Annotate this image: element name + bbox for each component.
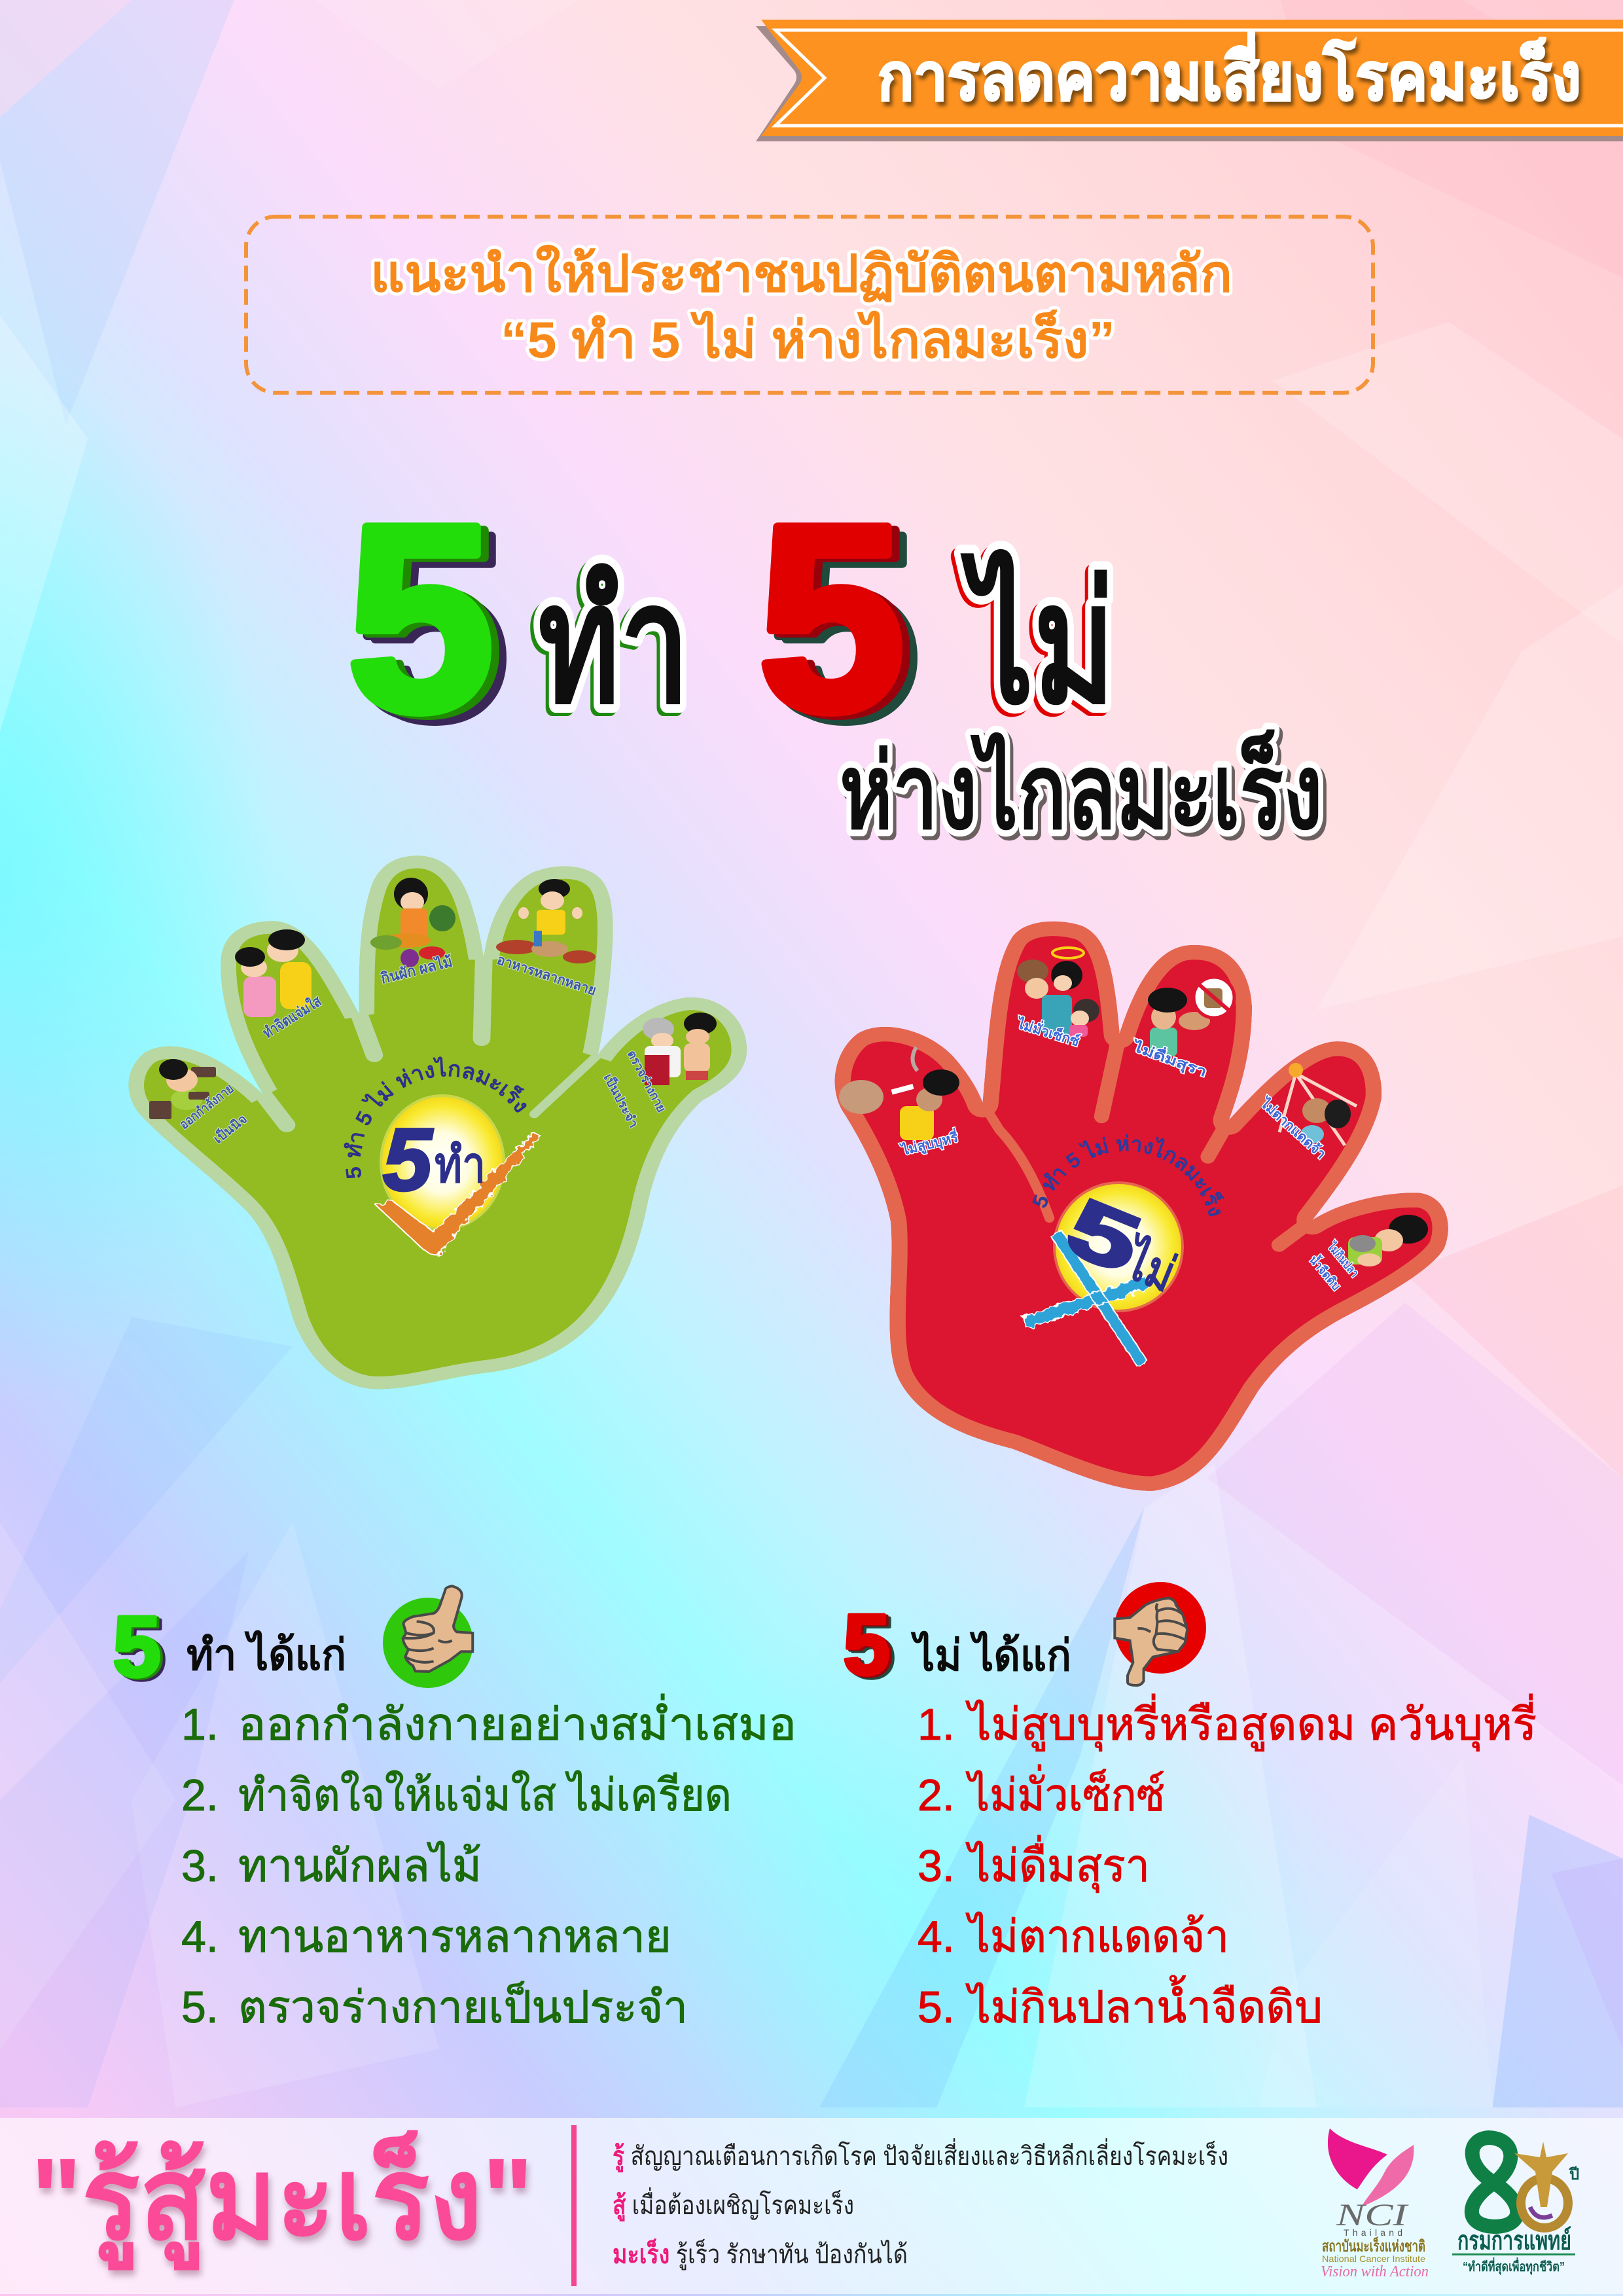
badge word tham: ทำ — [435, 1138, 486, 1193]
item 3: 3. — [918, 1841, 955, 1891]
badge: yellow circle — [1054, 1183, 1183, 1311]
hand shape — [835, 922, 1448, 1491]
finger: smoking — [839, 1047, 959, 1140]
label: happy mind: ทำจิตแจ่มใส — [259, 992, 325, 1041]
item 1: 1. — [181, 1700, 219, 1749]
finger: no unsafe sex — [1017, 948, 1099, 1037]
ribbon shadow — [756, 26, 1623, 141]
footer translucent background — [0, 2118, 1623, 2294]
blue cross mark — [1022, 1230, 1149, 1367]
logo department name: กรมการแพทย์ — [1457, 2226, 1571, 2255]
label: exercise: ออกกำลังกาย — [177, 1081, 236, 1132]
red hand: 5 don't — [835, 922, 1448, 1491]
badge 5 tham — [383, 1110, 486, 1209]
item 1 text: ออกกำลังกายอย่างสม่ำเสมอ — [238, 1694, 796, 1749]
label: regularly: เป็นนิจ — [210, 1111, 250, 1147]
logo: Department of Medical Services 80 years — [1452, 2138, 1579, 2275]
callout line 1: แนะนำให้ประชาชนปฏิบัติตนตามหลัก — [370, 244, 1232, 302]
badge word mai: ไม่ — [1115, 1230, 1184, 1303]
panel: 5 do list — [113, 1586, 796, 2032]
logo butterfly — [1328, 2128, 1387, 2189]
item 5: 5. — [918, 1982, 955, 2032]
badge 5 mai — [1055, 1181, 1184, 1303]
green hand: 5 do — [128, 855, 747, 1389]
logo motto: “ทำดีที่สุดเพื่อทุกชีวิต” — [1463, 2257, 1565, 2275]
banner: title ribbon — [756, 20, 1623, 141]
badge arc text: 5 ทำ 5 ไม่ ห่างไกลมะเร็ง — [1032, 1134, 1224, 1216]
logo: National Cancer Institute — [1321, 2128, 1429, 2280]
item 4: 4. — [918, 1912, 955, 1962]
dashed frame — [246, 217, 1373, 393]
green 5: 5 — [347, 469, 494, 766]
tham: ทำ — [538, 551, 690, 738]
list items — [918, 1694, 1537, 2032]
footer slogan: "รู้สู้มะเร็ง" — [31, 2130, 533, 2270]
red 5: 5 — [758, 469, 905, 766]
label: vegetables: กินผัก ผลไม้ — [379, 952, 454, 987]
badge: yellow circle — [381, 1096, 504, 1229]
big heading: 5 do 5 don't — [347, 469, 1323, 850]
footer line 3: มะเร็ง รู้เร็ว รักษาทัน ป้องกันได้ — [613, 2238, 908, 2270]
item 4: 4. — [181, 1912, 219, 1962]
logo inner arc — [1530, 2207, 1552, 2217]
item 1: 1. — [918, 1700, 955, 1749]
label: regularly: เป็นประจำ — [601, 1071, 642, 1130]
label: no raw fish: ไม่กินปลา — [1325, 1239, 1362, 1280]
finger: happy mind — [235, 929, 312, 1017]
label: raw freshwater: น้ำจืดดิบ — [1307, 1251, 1345, 1293]
finger: no raw fish — [1348, 1215, 1428, 1266]
item 3 text: ไม่ดื่มสุรา — [965, 1835, 1150, 1893]
heading 5: 5 — [113, 1598, 161, 1695]
logo tagline: Vision with Action — [1321, 2263, 1429, 2280]
item 1 text: ไม่สูบบุหรี่หรือสูดดม ควันบุหรี่ — [965, 1694, 1537, 1751]
logo thai name: สถาบันมะเร็งแห่งชาติ — [1322, 2236, 1425, 2255]
label: varied food: อาหารหลากหลาย — [495, 952, 598, 999]
callout: dashed box with advice — [246, 217, 1373, 393]
finger: no strong sun — [1279, 1063, 1357, 1145]
callout line 2: “5 ทำ 5 ไม่ ห่างไกลมะเร็ง” — [501, 310, 1115, 368]
ribbon body — [761, 20, 1623, 136]
label: no unsafe sex: ไม่มั่วเซ็กซ์ — [1014, 1013, 1082, 1049]
item 5 text: ไม่กินปลาน้ำจืดดิบ — [965, 1975, 1323, 2032]
badge numeral 5: 5 — [383, 1110, 433, 1209]
logo numeral 8 — [1472, 2138, 1517, 2227]
item 5 text: ตรวจร่างกายเป็นประจำ — [238, 1981, 688, 2032]
badge arc text: 5 ทำ 5 ไม่ ห่างไกลมะเร็ง — [344, 1056, 526, 1178]
label: no strong sun: ไม่ตากแดดจ้า — [1257, 1094, 1329, 1162]
item 3: 3. — [181, 1841, 219, 1891]
item 2: 2. — [181, 1770, 219, 1820]
heading text: ทำ ได้แก่ — [187, 1630, 346, 1679]
item 3 text: ทานผักผลไม้ — [238, 1840, 482, 1891]
icon: thumbs down — [1115, 1582, 1206, 1685]
logo script NCI: NCI — [1336, 2198, 1409, 2233]
logo rule — [1452, 2253, 1575, 2255]
footer divider — [571, 2125, 577, 2286]
footer band — [0, 2118, 1623, 2294]
label: no smoking: ไม่สูบบุหรี่ — [899, 1126, 961, 1160]
finger: vegetables — [370, 878, 455, 967]
ribbon inner line — [776, 30, 1623, 126]
mai: ไม่ — [960, 548, 1115, 738]
orange check mark — [376, 1132, 541, 1255]
finger: check up — [643, 1013, 717, 1085]
badge numeral 5: 5 — [1055, 1181, 1152, 1291]
logo emblem — [1514, 2142, 1568, 2207]
panel: 5 don't list — [843, 1582, 1537, 2032]
heading text: ไม่ ได้แก่ — [910, 1630, 1071, 1679]
heading 5: 5 — [843, 1596, 890, 1693]
footer line 2: สู้ เมื่อต้องเผชิญโรคมะเร็ง — [613, 2187, 854, 2221]
label: check up: ตรวจร่างกาย — [624, 1048, 668, 1115]
finger: no alcohol — [1148, 977, 1234, 1056]
finger: exercise — [149, 1059, 216, 1119]
item 4 text: ไม่ตากแดดจ้า — [965, 1911, 1229, 1962]
item 4 text: ทานอาหารหลากหลาย — [238, 1912, 671, 1962]
logo Thailand: Thailand — [1344, 2227, 1402, 2238]
subheading far from cancer: ห่างไกลมะเร็ง — [840, 729, 1323, 850]
item 2: 2. — [918, 1770, 955, 1820]
hand shape — [129, 855, 747, 1389]
logo numeral 0 — [1521, 2178, 1568, 2228]
logo year mark: ปี — [1569, 2166, 1579, 2183]
item 2 text: ทำจิตใจให้แจ่มใส ไม่เครียด — [238, 1770, 732, 1820]
logo english name: National Cancer Institute — [1322, 2253, 1425, 2264]
label: no alcohol: ไม่ดื่มสุรา — [1129, 1035, 1210, 1081]
item 5: 5. — [181, 1982, 219, 2032]
list items — [181, 1694, 796, 2032]
footer line 1: รู้ สัญญาณเตือนการเกิดโรค ปัจจัยเสี่ยงและวิธีหลีกเลี่ยงโรคมะเร็ง — [613, 2138, 1228, 2172]
item 2 text: ไม่มั่วเซ็กซ์ — [965, 1765, 1165, 1820]
icon: thumbs up — [383, 1586, 473, 1688]
finger: varied food — [496, 879, 596, 963]
